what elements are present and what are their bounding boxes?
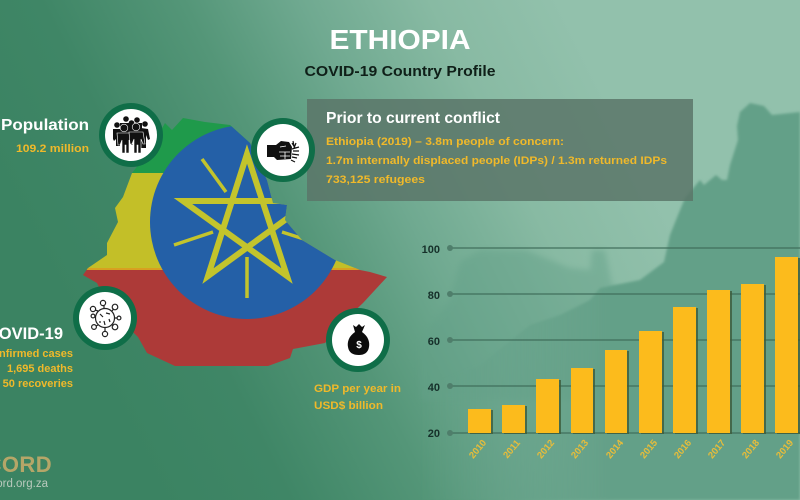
gdp caption xyxy=(314,383,401,412)
icon: money bag: $ xyxy=(356,340,362,351)
x axis labels: 2015 xyxy=(638,437,661,461)
panel heading: Prior to current conflict xyxy=(326,110,500,127)
map of Ethiopia with flag xyxy=(83,118,387,366)
gdp caption: GDP per year in xyxy=(314,383,401,395)
icon: virus xyxy=(73,286,137,350)
x axis labels xyxy=(467,437,796,461)
x axis labels: 2016 xyxy=(672,438,694,461)
panel: prior to current conflict xyxy=(307,99,693,201)
title: ETHIOPIA xyxy=(330,24,470,55)
population value: 109.2 million xyxy=(16,143,89,155)
y axis labels: 80 xyxy=(428,290,440,302)
covid-19 figures: 1,695 deaths xyxy=(7,363,73,375)
bars xyxy=(468,257,798,433)
flag star xyxy=(174,154,311,298)
population label xyxy=(1,117,89,155)
background mountains xyxy=(380,103,800,500)
x axis labels: 2010 xyxy=(467,438,489,461)
bar chart: GDP xyxy=(422,244,800,461)
y axis labels: 20 xyxy=(428,428,440,440)
logo xyxy=(0,452,52,490)
x axis labels: 2018 xyxy=(740,438,762,461)
covid-19 label xyxy=(0,325,73,390)
y axis labels: 60 xyxy=(428,336,440,348)
panel text: 733,125 refugees xyxy=(326,174,425,186)
x axis labels: 2014 xyxy=(604,437,627,461)
x axis labels: 2013 xyxy=(569,438,591,461)
icon: fist conflict xyxy=(251,118,315,182)
x axis labels: 2012 xyxy=(535,438,557,461)
panel text: Ethiopia (2019) – 3.8m people of concern: xyxy=(326,136,564,148)
icon: population xyxy=(99,103,163,167)
x axis labels: 2017 xyxy=(706,438,728,461)
gdp caption: USD$ billion xyxy=(314,400,383,412)
y axis labels: 40 xyxy=(428,382,440,394)
panel text xyxy=(326,136,667,186)
icon: money bag xyxy=(326,308,390,372)
y axis labels: 100 xyxy=(422,244,440,256)
y axis labels xyxy=(422,244,440,440)
bar shadows xyxy=(470,258,800,434)
panel text: 1.7m internally displaced people (IDPs) / 1.3m returned IDPs xyxy=(326,155,667,167)
covid-19 figures xyxy=(0,348,73,390)
population label: Population xyxy=(1,117,89,134)
x axis labels: 2011 xyxy=(501,437,523,461)
x axis labels: 2019 xyxy=(774,438,796,461)
covid-19 figures: 50 recoveries xyxy=(3,378,73,390)
subtitle: COVID-19 Country Profile xyxy=(304,64,496,80)
